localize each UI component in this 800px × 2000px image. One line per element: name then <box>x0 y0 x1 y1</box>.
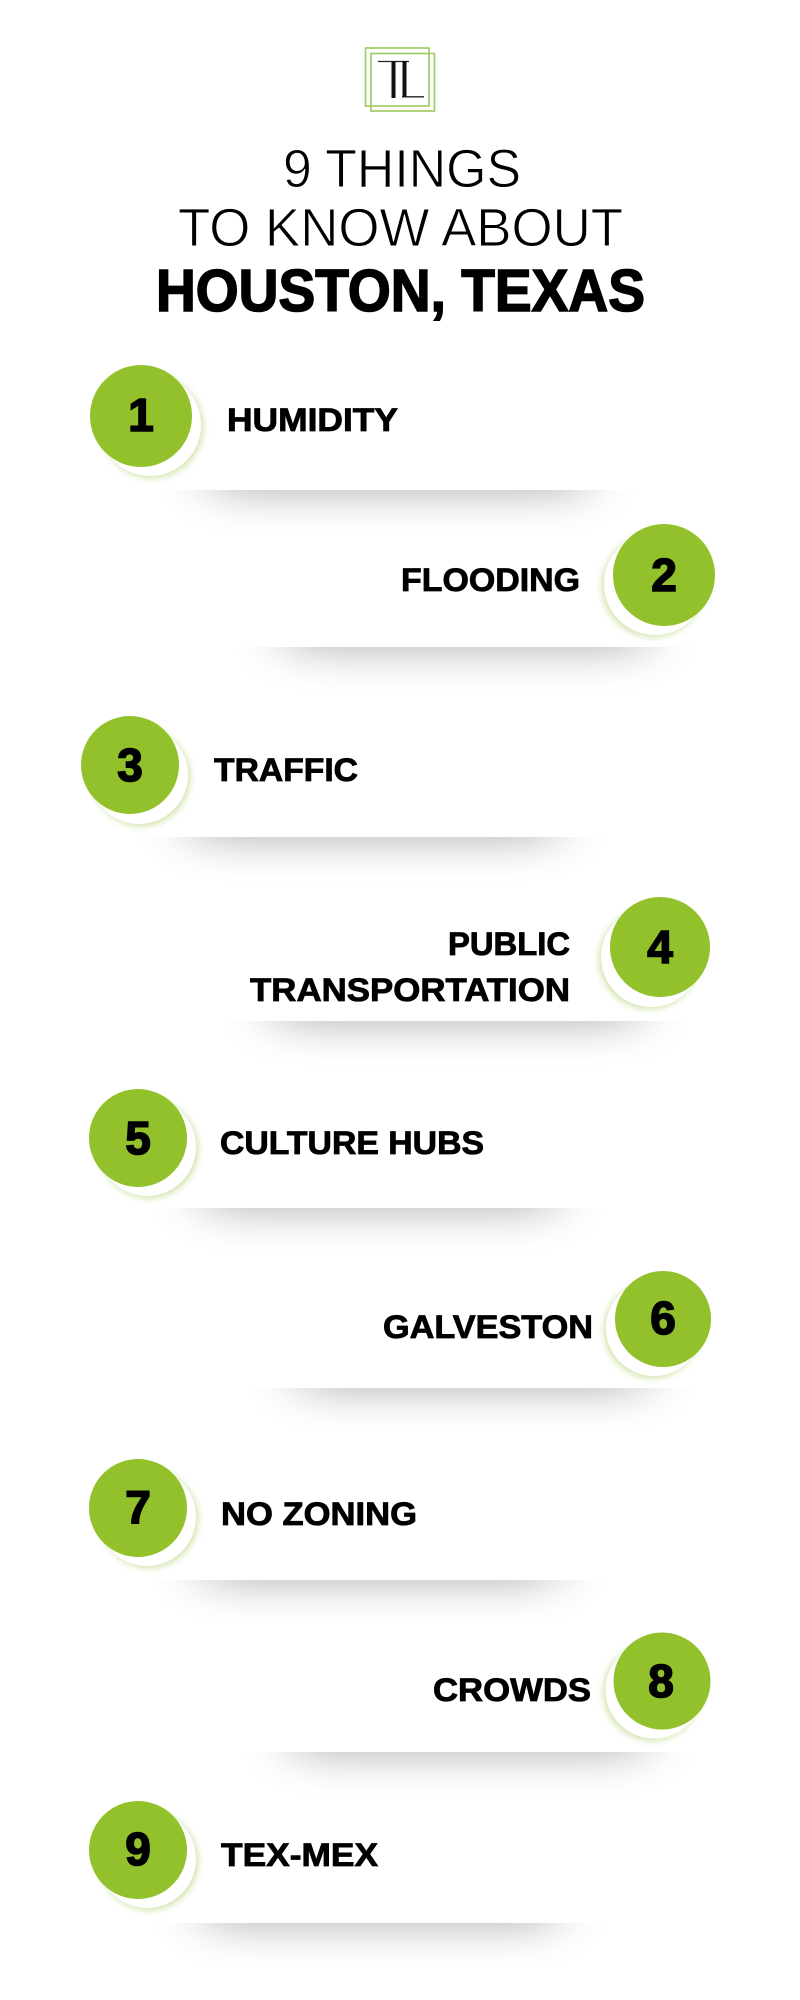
item 3: traffic: TRAFFIC <box>214 752 358 788</box>
item 5: culture hubs: 5 <box>125 1112 151 1164</box>
item 9: tex-mex: TEX-MEX <box>221 1837 379 1873</box>
item 3: traffic: 3 <box>117 739 143 791</box>
item 7: no zoning <box>89 1459 554 1585</box>
item 4: public transportation: PUBLIC <box>448 926 570 962</box>
item 5: culture hubs: CULTURE HUBS <box>220 1125 484 1161</box>
item 4: public transportation: 4 <box>647 921 673 973</box>
item 2: flooding: FLOODING <box>401 562 580 598</box>
item 3: traffic <box>81 716 554 842</box>
title <box>156 139 645 324</box>
item 7: no zoning: NO ZONING <box>221 1496 417 1532</box>
item 8: crowds: 8 <box>648 1655 674 1707</box>
item 4: public transportation <box>250 897 710 1026</box>
title line: 9 things: 9 THINGS <box>283 139 521 199</box>
item 8: crowds <box>294 1632 710 1757</box>
item 1: humidity: HUMIDITY <box>227 402 398 438</box>
item 1: humidity <box>90 365 584 495</box>
item 7: no zoning: 7 <box>125 1481 151 1533</box>
item 5: culture hubs <box>89 1089 554 1213</box>
item 4: public transportation: TRANSPORTATION <box>250 972 570 1008</box>
item 6: galveston: GALVESTON <box>383 1309 593 1345</box>
item 8: crowds: CROWDS <box>433 1672 591 1708</box>
title line: to know about: TO KNOW ABOUT <box>178 198 623 258</box>
item 2: flooding <box>287 524 715 652</box>
item 6: galveston <box>301 1271 711 1393</box>
item 9: tex-mex: 9 <box>125 1823 151 1875</box>
logo <box>366 48 434 111</box>
item 1: humidity: 1 <box>128 389 154 441</box>
item 9: tex-mex <box>89 1801 554 1928</box>
title line: Houston, Texas: HOUSTON, TEXAS <box>156 258 645 324</box>
item 6: galveston: 6 <box>650 1292 676 1344</box>
item 2: flooding: 2 <box>651 549 677 601</box>
